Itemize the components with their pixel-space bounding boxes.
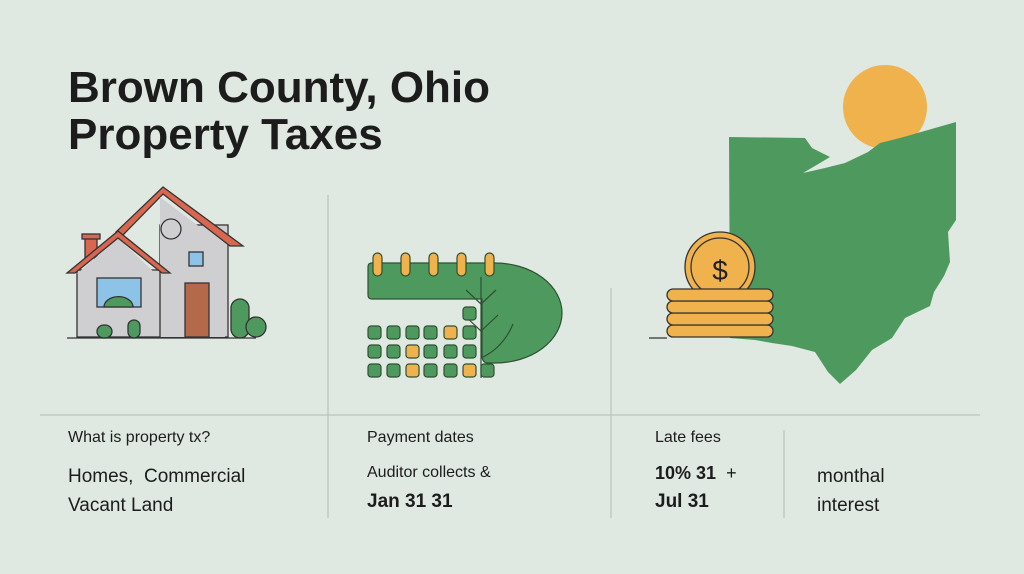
title <box>68 63 490 159</box>
text: Jul 31 <box>655 491 709 512</box>
map: Ohio <box>729 122 956 384</box>
dollar sign: $ <box>712 255 728 286</box>
column 1 text: What is property tx? <box>68 429 210 446</box>
text: Auditor collects & <box>367 464 491 481</box>
divider lines <box>40 195 980 518</box>
icon: house <box>67 187 266 338</box>
column 4 text: monthal <box>817 466 885 487</box>
title: Property Taxes <box>68 110 383 159</box>
text: Homes, Commercial <box>68 466 245 487</box>
icon: calendar with leaf <box>368 253 562 378</box>
text: 10% 31 + <box>655 463 737 483</box>
column 3 text: Late fees <box>655 429 721 446</box>
text: Vacant Land <box>68 495 173 516</box>
column 4 text <box>817 466 885 516</box>
column 2 text: Payment dates <box>367 429 474 446</box>
icon: coin stack <box>649 232 773 338</box>
title: Brown County, Ohio <box>68 63 490 112</box>
icon: sun <box>843 65 927 149</box>
text: Jan 31 31 <box>367 491 453 512</box>
column 4 text: interest <box>817 495 879 516</box>
